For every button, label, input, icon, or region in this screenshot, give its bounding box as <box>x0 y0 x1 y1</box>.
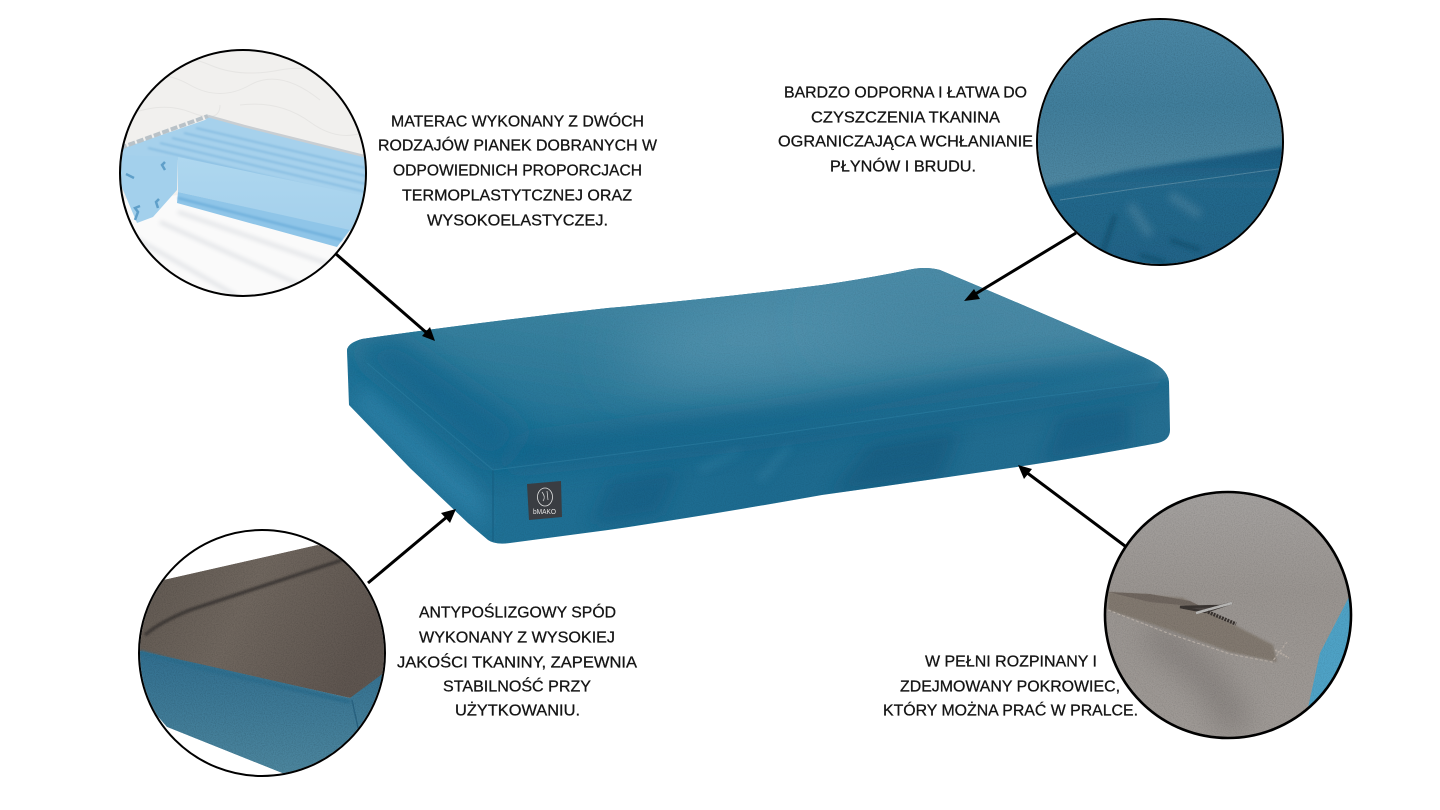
detail circle: fabric close-up <box>1030 18 1290 270</box>
brand label on mattress <box>527 481 562 520</box>
fabric top <box>1035 18 1285 268</box>
mattress side faces <box>340 260 1180 550</box>
text: zipper description <box>883 654 1138 720</box>
text: fabric description <box>778 84 1033 176</box>
text: foam description <box>378 114 657 230</box>
text: foam description: RODZAJÓW PIANEK DOBRANYCH W <box>378 138 657 154</box>
detail circle: zipper <box>1100 488 1360 748</box>
text: fabric description: PŁYNÓW I BRUDU. <box>830 158 976 176</box>
arrow: underside to mattress <box>368 509 456 583</box>
text: fabric description: BARDZO ODPORNA I ŁATWA DO <box>784 84 1027 102</box>
label logo <box>538 488 552 506</box>
detail circle: foam layers <box>119 49 367 297</box>
stitching <box>1108 610 1287 662</box>
quilted cover <box>122 51 364 238</box>
text: zipper description: W PEŁNI ROZPINANY I <box>925 654 1097 670</box>
text: underside description: UŻYTKOWANIU. <box>455 702 580 720</box>
blue side wall <box>135 650 390 775</box>
text: foam description: WYSOKOELASTYCZEJ. <box>427 212 608 230</box>
zipper flap <box>1108 592 1277 662</box>
foam end blocks <box>121 156 178 223</box>
stitched corner seam <box>492 470 494 541</box>
circle outline <box>139 530 385 776</box>
zipper fold shadow <box>1150 630 1240 730</box>
text: foam description: TERMOPLASTYTCZNEJ ORAZ <box>402 188 632 204</box>
blue side <box>1308 598 1350 706</box>
base seam <box>145 560 342 635</box>
text: zipper description: ZDEJMOWANY POKROWIEC, <box>900 678 1120 696</box>
text: underside description: WYKONANY Z WYSOKIEJ <box>419 630 615 646</box>
circle outline <box>1037 19 1283 265</box>
arrow: zipper to mattress <box>1018 465 1125 546</box>
text: underside description <box>397 604 638 720</box>
dark fold band <box>1046 144 1282 264</box>
circle outline <box>120 50 366 296</box>
label wordmark: bMAKO <box>533 509 557 516</box>
brown base <box>135 545 390 698</box>
grey fabric <box>1106 493 1348 737</box>
text: fabric description: CZYSZCZENIA TKANINA <box>811 110 1001 126</box>
text: fabric description: OGRANICZAJĄCA WCHŁANIANIE <box>778 134 1033 150</box>
arrow: foam to mattress <box>336 254 435 341</box>
label tag <box>527 481 562 520</box>
text: underside description: JAKOŚCI TKANINY, ZAPEWNIA <box>397 654 638 672</box>
text: foam description: MATERAC WYKONANY Z DWÓCH <box>391 114 644 130</box>
mattress product photo <box>347 268 1170 544</box>
text: foam description: ODPOWIEDNICH PROPORCJACH <box>393 162 642 180</box>
circle outline <box>1105 492 1351 738</box>
text: underside description: ANTYPOŚLIZGOWY SPÓD <box>419 604 616 622</box>
seam line <box>1060 168 1285 200</box>
white lower mattress <box>124 196 345 295</box>
text: underside description: STABILNOŚĆ PRZY <box>443 678 591 696</box>
mattress top face <box>347 268 1170 542</box>
white background <box>135 525 395 785</box>
arrow: fabric to mattress <box>964 233 1076 301</box>
detail circle: anti-slip underside <box>135 525 395 785</box>
foam ribbed top <box>118 117 370 200</box>
foam beam front <box>178 157 370 232</box>
text: zipper description: KTÓRY MOŻNA PRAĆ W PRALCE. <box>883 702 1138 720</box>
zipper pull <box>1180 603 1232 612</box>
